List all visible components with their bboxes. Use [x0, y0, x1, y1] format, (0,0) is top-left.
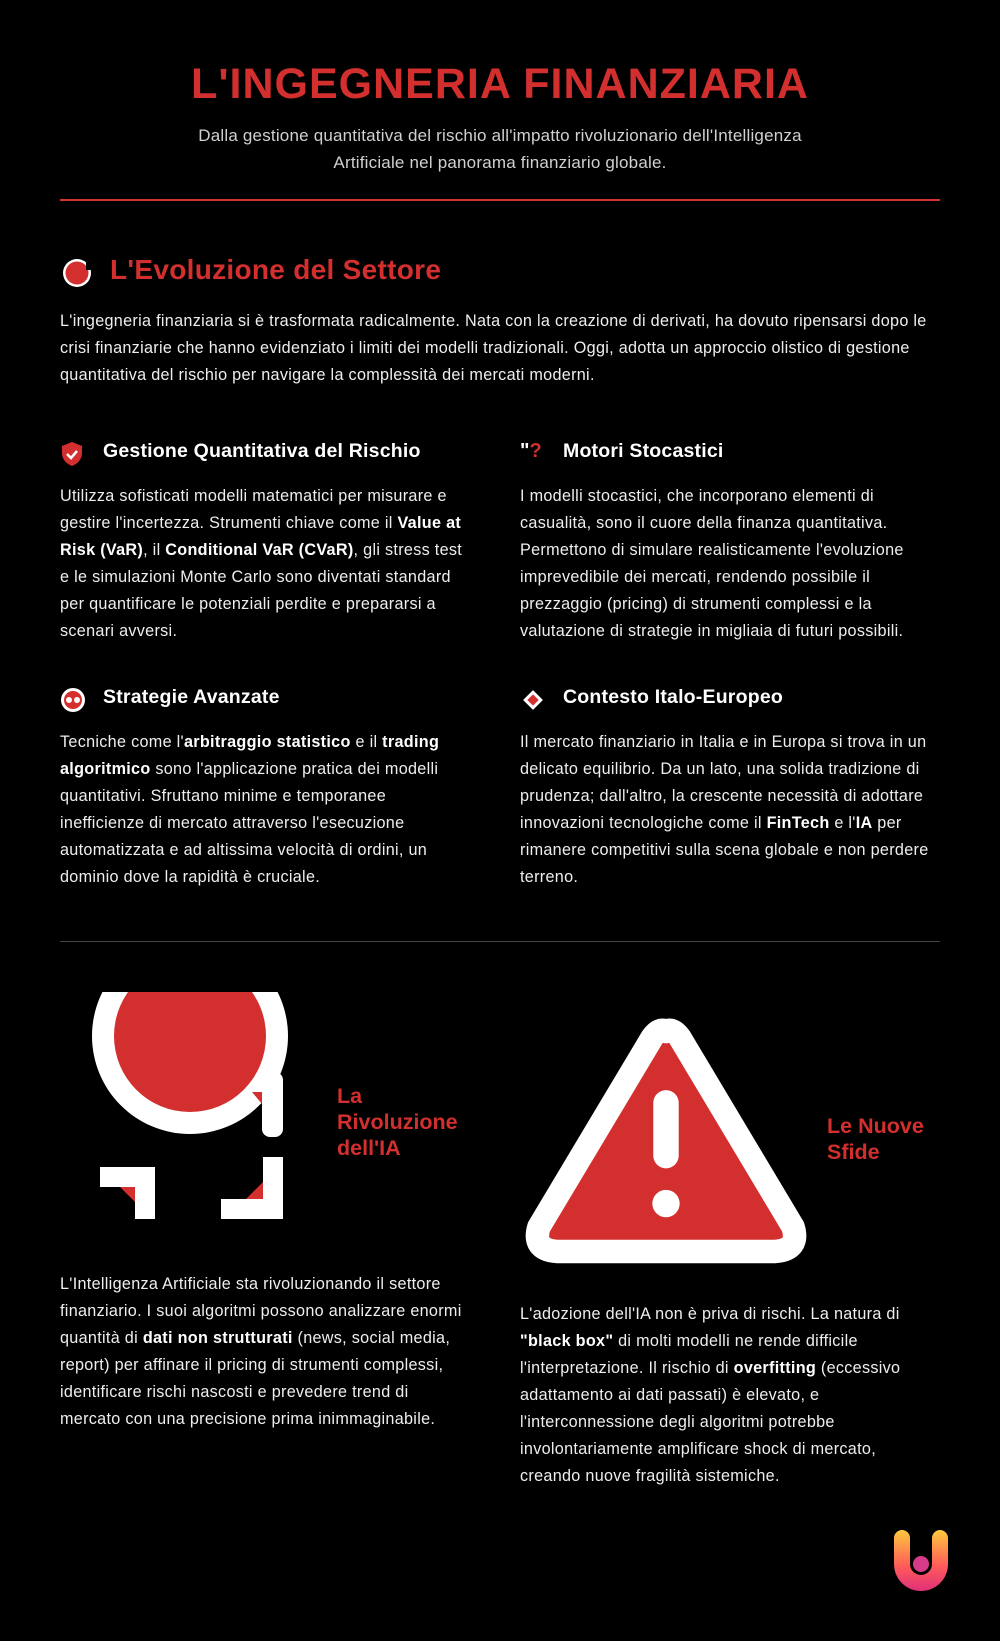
intro paragraph: L'ingegneria finanziaria si è trasformata radicalmente. Nata con la creazione di derivati, ha dovuto ripensarsi dopo le crisi finanziarie che hanno evidenziato i limiti dei modelli tradizionali. Oggi, adotta un approccio olistico di gestione quantitativa del rischio per navigare la complessità dei mercati moderni. — [60, 312, 927, 384]
panel: motori stocastici: I modelli stocastici, che incorporano elementi di casualità, sono il cuore della finanza quantitativa. Permettono di simulare realisticamente l'evoluzione imprevedibile dei mercati, rendendo possibile il prezzaggio (pricing) di strumenti complessi e la valutazione di strategie in migliaia di futuri possibili. — [520, 487, 904, 640]
icon: AI scan — [92, 992, 288, 1219]
panel: strategie avanzate: Tecniche come l'arbitraggio statistico e il trading algoritmico sono l'applicazione pratica dei modelli quantitativi. Sfruttano minime e temporanee inefficienze di mercato attraverso l'esecuzione automatizzata e ad altissima velocità di ordini, un dominio dove la rapidità è cruciale. — [60, 733, 439, 886]
icon: stochastic: "? — [520, 440, 542, 462]
label — [827, 1114, 924, 1164]
label: Sfide — [827, 1140, 880, 1164]
panel: contesto italo-europeo: Contesto Italo-Europeo — [563, 686, 783, 708]
icon: warning triangle — [526, 1018, 806, 1264]
panel: strategie avanzate: Strategie Avanzate — [103, 686, 280, 708]
label: Le Nuove — [827, 1114, 924, 1138]
panel: nuove sfide: L'adozione dell'IA non è priva di rischi. La natura di "black box" di molti modelli ne rende difficile l'interpretazione. Il rischio di overfitting (eccessivo adattamento ai dati passati) è elevato, e l'interconnessione degli algoritmi potrebbe involontariamente amplificare shock di mercato, creando nuove fragilità sistemiche. — [520, 1305, 900, 1485]
icon: strategy — [61, 688, 85, 712]
subtitle: Dalla gestione quantitativa del rischio all'impatto rivoluzionario dell'Intelligenza Artificiale nel panorama finanziario globale. — [198, 126, 802, 172]
panel: rivoluzione IA — [60, 992, 462, 1428]
section heading: evoluzione: L'Evoluzione del Settore — [110, 254, 441, 285]
title: L'INGEGNERIA FINANZIARIA — [191, 60, 809, 108]
label — [337, 1084, 458, 1160]
panel: rischio: Utilizza sofisticati modelli matematici per misurare e gestire l'incertezza. Strumenti chiave come il Value at Risk (VaR), il Conditional VaR (CVaR), gli stress test e le simulazioni Monte Carlo sono diventati standard per quantificare le potenziali perdite e prepararsi a scenari avversi. — [60, 487, 462, 640]
label: La — [337, 1084, 362, 1108]
logo — [894, 1530, 948, 1591]
icon: diamond — [523, 690, 543, 710]
panel: nuove sfide — [520, 1018, 924, 1485]
panel: rivoluzione IA: L'Intelligenza Artificiale sta rivoluzionando il settore finanziario. I suoi algoritmi possono analizzare enormi quantità di dati non strutturati (news, social media, report) per affinare il pricing di strumenti complessi, identificare rischi nascosti e prevedere trend di mercato con una precisione prima inimmaginabile. — [60, 1275, 462, 1428]
icon: shield — [62, 442, 82, 466]
label: Rivoluzione — [337, 1110, 458, 1134]
label: dell'IA — [337, 1136, 401, 1160]
panel: motori stocastici: Motori Stocastici — [563, 440, 724, 462]
icon: evolution — [63, 259, 91, 287]
panel: rischio: Gestione Quantitativa del Rischio — [103, 440, 421, 462]
panel: contesto italo-europeo: Il mercato finanziario in Italia e in Europa si trova in un delicato equilibrio. Da un lato, una solida tradizione di prudenza; dall'altro, la crescente necessità di adottare innovazioni tecnologiche come il FinTech e l'IA per rimanere competitivi sulla scena globale e non perdere terreno. — [520, 733, 929, 886]
